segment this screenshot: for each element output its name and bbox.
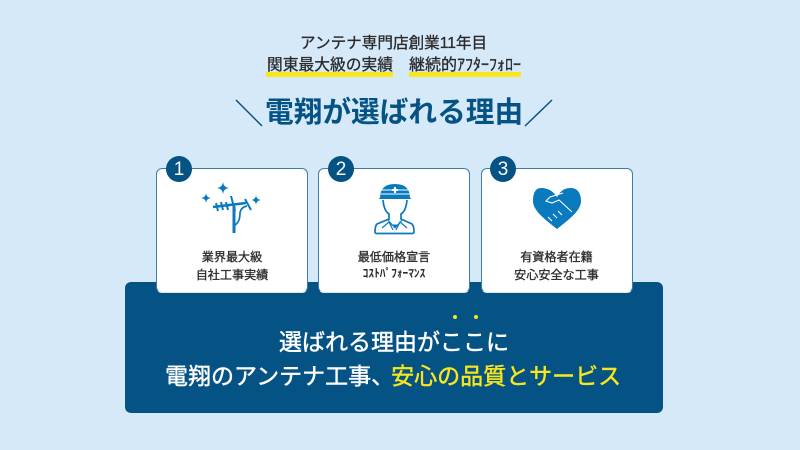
message line 1: 選ばれる理由がここに <box>279 329 509 355</box>
highlight: continued aftercare: 継続的ｱﾌﾀｰﾌｫﾛｰ <box>409 57 521 74</box>
emphasis dots <box>453 315 478 319</box>
heading with slashes: 電翔が選ばれる理由 <box>265 97 523 129</box>
card 2 text line 2: ｺｽﾄﾊﾟﾌｫｰﾏﾝｽ <box>363 268 425 280</box>
subtitle: antenna specialist: アンテナ専門店創業11年目 <box>300 34 487 52</box>
panel: reason 2 <box>318 168 470 293</box>
badge 2: 2 <box>336 159 346 180</box>
badge 1: 1 <box>174 159 184 180</box>
highlight: largest in Kanto: 関東最大級の実績 <box>267 57 393 74</box>
icon: antenna <box>201 182 261 233</box>
badge 1 <box>166 156 192 182</box>
badge 3 <box>490 156 516 182</box>
card 1 text line 2: 自社工事実績 <box>196 268 268 282</box>
card 3 text: 有資格者在籍 <box>520 250 593 264</box>
card 2 text: 最低価格宣言 <box>358 250 430 264</box>
panel: reason 1 <box>156 168 308 293</box>
badge 3: 3 <box>498 159 508 180</box>
badge 2 <box>328 156 354 182</box>
panel: bottom message <box>125 282 663 413</box>
card 1 text: 業界最大級 <box>202 250 262 264</box>
card 3 text line 2: 安心安全な工事 <box>514 268 599 282</box>
panel: reason 3 <box>480 168 632 293</box>
icon: handshake heart <box>532 188 581 229</box>
icon: worker with helmet <box>374 184 415 234</box>
message line 2: 電翔のアンテナ工事、安心の品質とサービス <box>165 363 621 389</box>
